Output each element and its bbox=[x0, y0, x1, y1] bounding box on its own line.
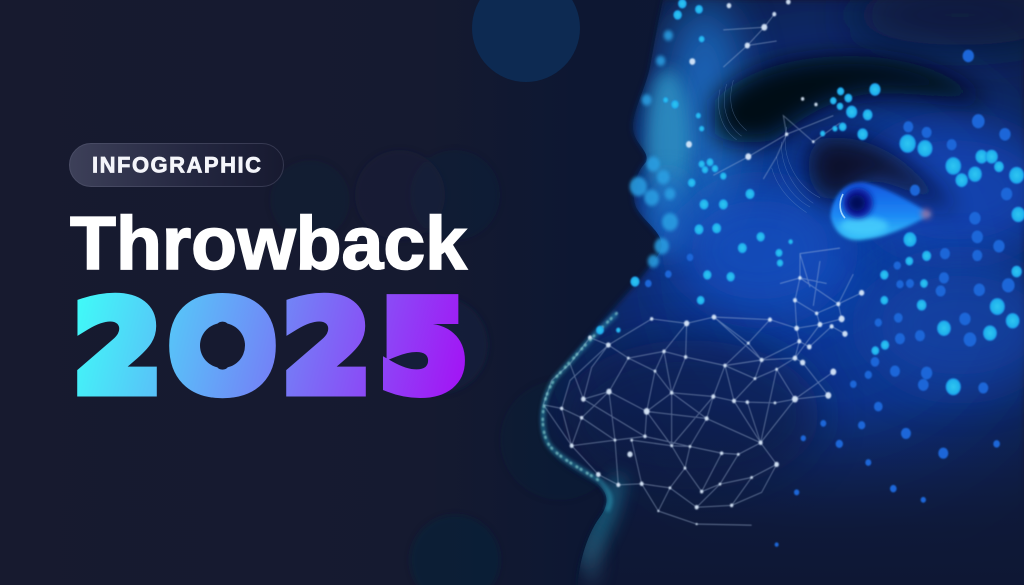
year: 2025: 0 bbox=[170, 277, 275, 419]
year: 2025: 2 bbox=[283, 277, 370, 419]
soft blurred forehead dots bbox=[630, 30, 678, 267]
mesh nodes bbox=[560, 0, 864, 525]
pill label: INFOGRAPHIC bbox=[92, 152, 261, 178]
year: 2025 bbox=[74, 277, 467, 419]
icon: eye bbox=[831, 182, 932, 240]
title: Throwback: Throwback bbox=[70, 201, 467, 285]
pill badge bbox=[70, 144, 284, 186]
year: 2025: 5 bbox=[380, 277, 467, 419]
face portrait bbox=[540, 0, 1024, 585]
deep blue bokeh dots bbox=[645, 50, 1015, 547]
face base skin bbox=[543, 0, 1024, 585]
eyelashes bbox=[719, 80, 820, 213]
bright bokeh dots bbox=[596, 0, 1024, 395]
pill background bbox=[70, 144, 284, 186]
face shading bbox=[540, 0, 1024, 585]
counter of zero bbox=[200, 323, 245, 368]
eyebrow and eyelid shadow bbox=[715, 56, 990, 212]
nose edge dots bbox=[543, 313, 617, 481]
bokeh circles bbox=[270, 0, 620, 585]
nose edge glow bbox=[543, 313, 617, 511]
mesh lines bbox=[543, 14, 862, 525]
face mesh network bbox=[543, 0, 864, 525]
year: 2025: 2 bbox=[74, 277, 161, 419]
